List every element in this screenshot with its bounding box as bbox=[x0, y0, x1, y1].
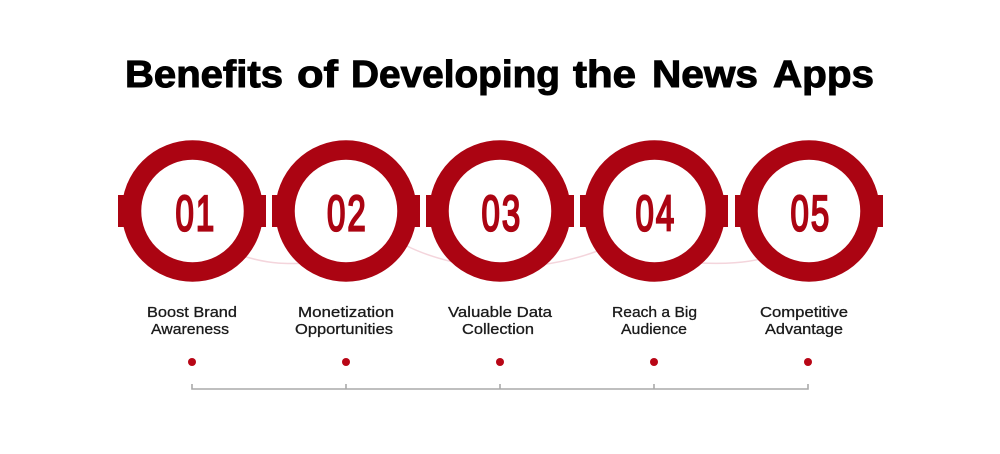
timeline dots bbox=[188, 358, 812, 366]
title bbox=[125, 54, 874, 96]
label 02: Opportunities bbox=[295, 321, 393, 338]
label 04 bbox=[612, 304, 697, 338]
title: Benefits bbox=[125, 54, 283, 96]
step 04: 04 bbox=[636, 186, 676, 241]
faint connecting wave bbox=[240, 245, 765, 268]
step 05 bbox=[735, 150, 883, 272]
step 03: 03 bbox=[482, 186, 522, 241]
title: Developing bbox=[351, 54, 560, 96]
title: the bbox=[573, 54, 636, 96]
step 03 bbox=[426, 150, 574, 272]
label 01: Awareness bbox=[151, 321, 229, 338]
timeline bracket bbox=[192, 384, 808, 389]
step 02 bbox=[272, 150, 420, 272]
title: News bbox=[652, 54, 758, 96]
label 05 bbox=[760, 304, 848, 338]
label 03: Valuable Data bbox=[448, 304, 553, 321]
label 05: Advantage bbox=[765, 321, 843, 338]
title: of bbox=[297, 54, 338, 96]
label 03: Collection bbox=[462, 321, 534, 338]
step 02: 02 bbox=[327, 186, 368, 241]
label 04: Reach a Big bbox=[612, 304, 697, 321]
step 01: 01 bbox=[176, 186, 216, 241]
label 02 bbox=[295, 304, 394, 338]
label 03 bbox=[448, 304, 553, 338]
step 04 bbox=[580, 150, 728, 272]
step 01 bbox=[118, 150, 266, 272]
label 01: Boost Brand bbox=[147, 304, 237, 321]
step 05: 05 bbox=[790, 186, 831, 241]
label 04: Audience bbox=[621, 321, 687, 338]
label 05: Competitive bbox=[760, 304, 848, 321]
label 01 bbox=[147, 304, 237, 338]
title: Apps bbox=[773, 54, 874, 96]
label 02: Monetization bbox=[298, 304, 394, 321]
